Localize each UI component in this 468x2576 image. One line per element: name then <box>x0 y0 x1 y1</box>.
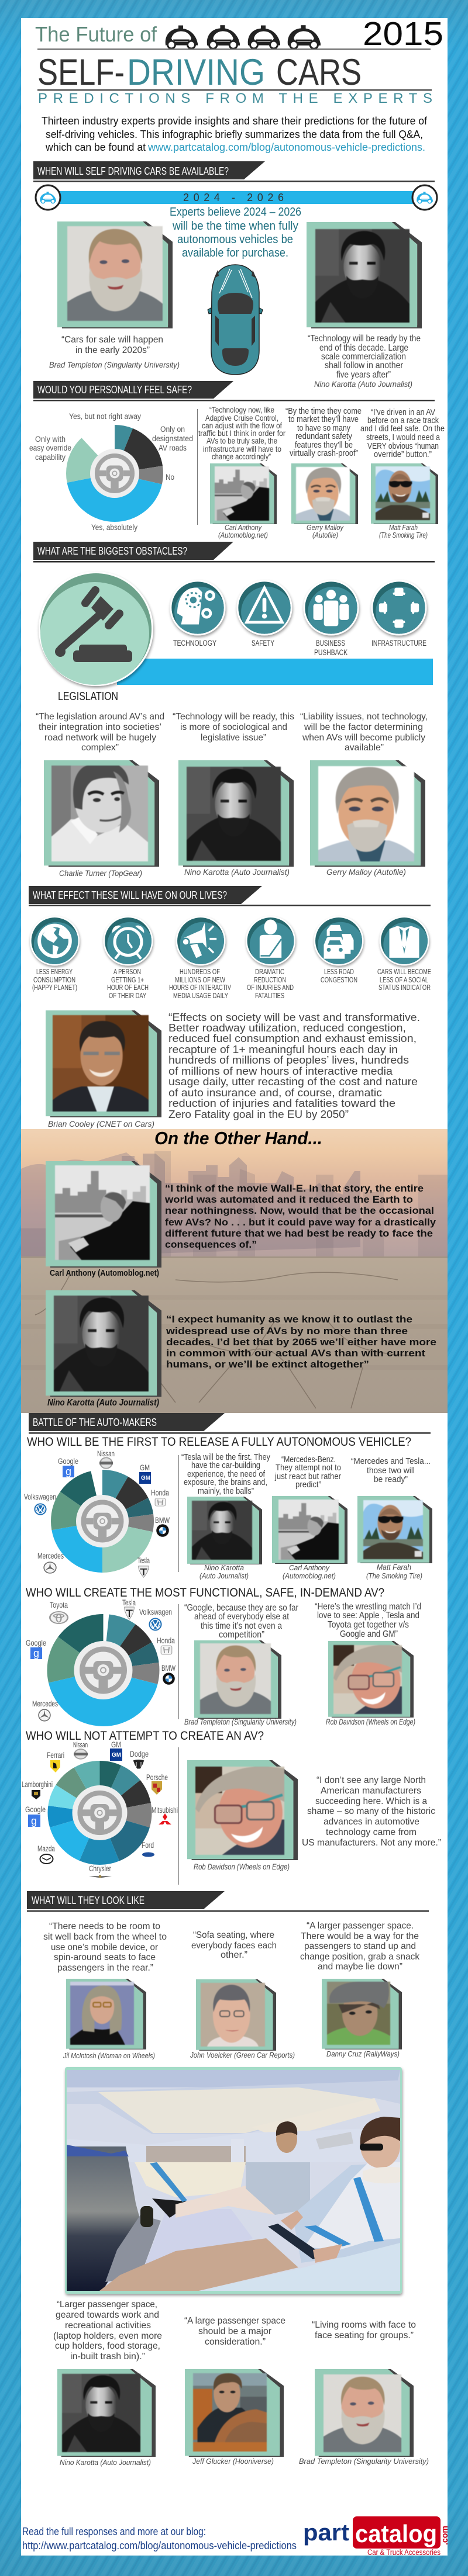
quote: Brad Templeton, Google <box>184 1603 299 1726</box>
effect: status <box>377 916 431 992</box>
section header: battle of the auto-makers <box>29 1413 431 1434</box>
brand labels and logos: Lamborghini <box>22 1780 53 1789</box>
effect: media: MILLIONS OF NEW <box>175 975 226 984</box>
quote: Jeff Glucker: “A large passenger space <box>184 2316 285 2326</box>
pie chart: feel safe: AV roads <box>159 444 187 452</box>
footer call to action: http://www.partcatalog.com/blog/autonomous-vehicle-predictions <box>22 2540 297 2551</box>
quote: Carl Anthony, Mercedes-Benz: Carl Anthony <box>289 1563 330 1572</box>
section header: what will they look like: WHAT WILL THEY LOOK LIKE <box>32 1895 144 1906</box>
pie chart: feel safe: No <box>166 473 174 482</box>
quote: Brian Cooley: of millions of new hours of interactive media <box>168 1065 393 1077</box>
expert: Brad Templeton: “Cars for sale will happen <box>61 335 163 345</box>
expert: Carl Anthony <box>46 1161 161 1278</box>
quote: Matt Farah <box>360 408 445 539</box>
pie chart: feel safe: easy override <box>29 444 71 452</box>
effect: injuries: FATALITIES <box>255 991 284 1000</box>
brand labels and logos: Ford <box>142 1841 154 1850</box>
effect: time: GETTING 1+ <box>111 975 144 984</box>
section header: when available: WHEN WILL SELF DRIVING CARS BE AVAILABLE? <box>37 165 229 177</box>
quote: Nino Karotta, larger passenger space: in-built trash bin).” <box>70 2352 145 2362</box>
expert: Rob Davidson <box>187 1760 298 1871</box>
pie chart: feel safe: Yes, absolutely <box>91 523 137 532</box>
quote: Brad Templeton, living rooms <box>299 2320 429 2466</box>
quote: Brad Templeton, Google: Brad Templeton (Singularity University) <box>184 1717 297 1726</box>
section header: when available <box>33 161 435 182</box>
headline prediction text: available for purchase. <box>182 247 288 259</box>
obstacle quote: Charlie Turner: complex” <box>81 743 119 753</box>
quote: Jeff Glucker: Jeff Glucker (Hooniverse) <box>192 2457 274 2466</box>
icon: technology <box>170 580 226 648</box>
quote: Carl Anthony: “I think of the movie Wall-E. In that story, the entire <box>165 1183 424 1194</box>
quote: Brian Cooley <box>168 1012 420 1120</box>
effect: congestion <box>314 916 364 984</box>
intro text: which can be found at <box>45 141 146 153</box>
brand labels and logos: Chrysler <box>89 1864 111 1873</box>
brand labels and logos: g <box>31 1815 37 1827</box>
quote: Carl Anthony: different future that we had best be ready to face the <box>165 1228 433 1239</box>
quote: Nino Karotta: humans, or we’ll be extinct altogether” <box>166 1359 369 1370</box>
quote: Gerry Malloy: to have so many <box>297 424 351 433</box>
brand labels and logos: GM <box>111 1740 121 1749</box>
quote: Matt Farah, Mercedes and Tesla: those two will <box>367 1466 415 1476</box>
pie chart: feel safe: capability <box>35 453 66 462</box>
effect: injuries: DRAMATIC <box>255 967 284 976</box>
quote: Gerry Malloy: virtually crash-proof” <box>290 449 358 458</box>
quote: Nino Karotta, larger passenger space: recreational activities <box>65 2321 151 2331</box>
expert: Nino Karotta <box>307 222 422 389</box>
icon: business pushback: PUSHBACK <box>314 648 347 657</box>
main title: DRIVING <box>127 52 265 93</box>
quote: Nino Karotta, Tesla first: (Auto Journalist) <box>199 1571 249 1580</box>
icon: safety: SAFETY <box>252 639 274 648</box>
quote: Matt Farah: and I did feel safe. On the <box>360 424 445 434</box>
intro text <box>42 115 428 153</box>
obstacle quote: Nino Karotta: Nino Karotta (Auto Journalist) <box>184 867 290 877</box>
obstacle quote: Charlie Turner: Charlie Turner (TopGear) <box>59 868 142 878</box>
headline prediction text: Experts believe 2024 – 2026 <box>170 206 301 219</box>
quote: Brian Cooley: reduced fuel consumption and exhaust emission, <box>168 1033 417 1044</box>
effect: time <box>103 916 153 1000</box>
effect: media <box>169 916 231 1000</box>
brand labels and logos: Mercedes <box>37 1552 64 1560</box>
quote: Carl Anthony: infrastructure will have to <box>203 445 281 453</box>
quote: Jeff Glucker <box>184 2316 285 2466</box>
quote: Nino Karotta, Tesla first: “Tesla will be the first. They <box>181 1453 271 1462</box>
headline prediction text <box>170 206 301 259</box>
effect: media: HOURS OF INTERACTIV <box>169 983 231 992</box>
brand labels and logos: g <box>66 1466 71 1477</box>
obstacle quote: Charlie Turner: “The legislation around AV’s and <box>36 712 164 722</box>
pie chart: feel safe: Only on <box>160 425 185 434</box>
brand labels and logos: Tesla <box>122 1598 136 1607</box>
obstacle quote: Gerry Malloy: available” <box>345 743 384 753</box>
quote: Carl Anthony, Mercedes-Benz: predict” <box>295 1480 321 1490</box>
section header: what will they look like <box>27 1891 429 1912</box>
quote: Nino Karotta, larger passenger space: “Larger passenger space, <box>57 2300 157 2310</box>
quote: Brian Cooley: recapture of 1+ meaningful hours each day in <box>168 1044 398 1055</box>
quote: Nino Karotta: “I expect humanity as we know it to outlast the <box>166 1314 412 1325</box>
quote: Carl Anthony, Mercedes-Benz: (Automoblog.net) <box>283 1571 336 1580</box>
brand labels and logos: Porsche <box>146 1773 168 1782</box>
obstacle quote: Gerry Malloy: when AVs will become publicly <box>302 733 425 743</box>
effect: status: CARS WILL BECOME <box>377 967 431 976</box>
brand labels and logos: Toyota <box>50 1601 68 1609</box>
expert: Nino Karotta: Nino Karotta (Auto Journalist) <box>314 379 412 389</box>
quote: Jil McIntosh <box>43 1921 167 2060</box>
quote: Danny Cruz: There would be a way for the <box>301 1931 419 1941</box>
pie chart: feel safe: Only with <box>35 435 66 444</box>
quote: Rob Davidson, wrestling match: “Here’s the wrestling match I’d <box>315 1602 421 1612</box>
quote: Carl Anthony <box>164 1183 436 1250</box>
quote: Nino Karotta: in common with our actual AVs than with current <box>166 1348 425 1359</box>
quote: Rob Davidson, wrestling match <box>315 1602 421 1726</box>
quote: Danny Cruz: Danny Cruz (RallyWays) <box>326 2049 400 2058</box>
icon: infrastructure: INFRASTRUCTURE <box>371 639 426 648</box>
heading: first to release: WHO WILL BE THE FIRST TO RELEASE A FULLY AUTONOMOUS VEHICLE? <box>27 1435 411 1449</box>
quote: Brian Cooley: hundreds of millions of peoples’ lives, hundreds <box>168 1054 409 1066</box>
expert: Brad Templeton: in the early 2020s” <box>75 345 150 355</box>
icon: legislation gavel: LEGISLATION <box>58 690 118 703</box>
main title <box>37 52 362 93</box>
section header: effects: WHAT EFFECT THESE WILL HAVE ON OUR LIVES? <box>33 889 227 901</box>
quote: Brad Templeton, Google: ahead of everybody else at <box>194 1612 289 1622</box>
obstacle quote: Gerry Malloy: Gerry Malloy (Autofile) <box>326 867 406 877</box>
obstacle quote: Gerry Malloy <box>300 712 428 877</box>
icons: self-driving cars row <box>166 25 321 49</box>
brand labels and logos: Nissan <box>97 1449 115 1458</box>
quote: Gerry Malloy: (Autofile) <box>312 531 338 539</box>
pie chart: first to release <box>24 1449 170 1577</box>
obstacle quote: Nino Karotta: legislative issue” <box>201 733 266 743</box>
quote: Gerry Malloy: to market they’ll have <box>288 415 359 424</box>
expert: Nino Karotta <box>46 1290 161 1408</box>
quote: Jil McIntosh: Jil McIntosh (Woman on Wheels) <box>63 2051 155 2060</box>
icon: car top view <box>208 265 263 375</box>
quote: Carl Anthony: consequences of.” <box>165 1239 257 1250</box>
subtitle: the future of: The Future of <box>35 22 157 46</box>
obstacle quote: Nino Karotta: is more of sociological and <box>180 722 287 732</box>
quote: Gerry Malloy: Gerry Malloy <box>307 523 344 532</box>
effect: energy: CONSUMPTION <box>33 975 75 984</box>
quote: Carl Anthony: can adjust with the flow of <box>202 421 282 430</box>
expert: Brad Templeton <box>49 221 180 369</box>
quote: Brad Templeton, Google: “Google, because they are so far <box>184 1603 299 1613</box>
logo: partcatalog.com: .com <box>440 2526 450 2545</box>
quote: Jil McIntosh: passengers in the rear.” <box>57 1963 153 1973</box>
photo: autonomous car interior <box>65 2067 402 2294</box>
section header: obstacles: WHAT ARE THE BIGGEST OBSTACLES? <box>37 545 187 557</box>
title block <box>35 15 443 106</box>
expert: Nino Karotta: end of this decade. Large <box>319 343 408 353</box>
quote: Nino Karotta, Tesla first <box>181 1453 271 1580</box>
quote: Matt Farah: override” button.” <box>374 450 432 459</box>
icon: technology: TECHNOLOGY <box>173 639 216 648</box>
expert: Rob Davidson: Rob Davidson (Wheels on Edge) <box>194 1862 290 1871</box>
intro text: www.partcatalog.com/blog/autonomous-vehicle-predictions. <box>147 141 425 153</box>
effect: energy <box>30 916 80 992</box>
quote: Matt Farah: streets, I would need a <box>366 433 441 442</box>
quote: Matt Farah: before on a race track <box>367 416 439 425</box>
quote: Carl Anthony, Mercedes-Benz: just react but rather <box>274 1472 341 1481</box>
heading: most functional: WHO WILL CREATE THE MOST FUNCTIONAL, SAFE, IN-DEMAND AV? <box>26 1586 384 1599</box>
quote: Carl Anthony, Mercedes-Benz <box>272 1455 347 1580</box>
quote: Rob Davidson: American manufacturers <box>321 1786 421 1796</box>
brand labels and logos: Google <box>26 1639 46 1647</box>
quote: Matt Farah: VERY obvious “human <box>367 442 439 451</box>
quote: Rob Davidson, wrestling match: Rob Davidson (Wheels on Edge) <box>326 1717 415 1726</box>
effect: time: OF THEIR DAY <box>109 991 146 1000</box>
quote: Matt Farah: Matt Farah <box>389 523 418 532</box>
quote: Carl Anthony: Carl Anthony <box>225 523 262 532</box>
expert: Nino Karotta: Nino Karotta (Auto Journalist) <box>47 1398 159 1408</box>
effect: congestion: CONGESTION <box>321 975 357 984</box>
year: 2015 <box>363 15 443 53</box>
brand labels and logos: BMW <box>161 1664 176 1673</box>
quote: Brad Templeton, living rooms: face seating for groups.” <box>315 2331 414 2340</box>
brand labels and logos: Google <box>58 1457 78 1466</box>
footer call to action: Read the full responses and more at our blog: <box>22 2526 206 2537</box>
brand labels and logos: GM <box>112 1752 121 1758</box>
icon: legislation gavel <box>39 572 153 703</box>
timeline band 2024-2026 <box>36 185 437 210</box>
effect: injuries <box>246 916 295 1000</box>
quote: Matt Farah, Mercedes and Tesla <box>351 1457 432 1580</box>
effect: injuries: REDUCTION <box>254 975 286 984</box>
quote: John Voelcker: everybody faces each <box>191 1941 277 1951</box>
quote: Nino Karotta, larger passenger space: (laptop holders, even more <box>53 2331 162 2341</box>
quote: Matt Farah, Mercedes and Tesla: (The Smoking Tire) <box>366 1571 422 1580</box>
quote: Rob Davidson: shame – so many of the historic <box>307 1806 435 1816</box>
brand labels and logos <box>26 1598 176 1721</box>
footer call to action <box>22 2526 297 2551</box>
pie chart: most functional <box>26 1598 176 1721</box>
quote: Jil McIntosh: sit well back from the wheel to <box>43 1932 167 1942</box>
pie chart: feel safe: designstated <box>152 434 193 443</box>
quote: Gerry Malloy <box>285 407 362 539</box>
quote: Jil McIntosh: “There needs to be room to <box>49 1921 160 1931</box>
quote: Nino Karotta <box>166 1314 436 1370</box>
brand labels and logos: Mitsubishi <box>152 1806 178 1815</box>
quote: Nino Karotta, Tesla first: mainly, the balls” <box>198 1487 254 1496</box>
quote: John Voelcker: John Voelcker (Green Car Reports) <box>190 2051 295 2059</box>
quote: Danny Cruz: and maybe lie down” <box>318 1962 402 1972</box>
quote: Rob Davidson, wrestling match: Toyota get together v/s <box>328 1620 409 1630</box>
obstacle quote: Nino Karotta <box>173 712 294 877</box>
expert: Nino Karotta: five years after” <box>336 370 391 380</box>
quote: Carl Anthony: few AVs? No . . . but it could pave way for a drastically <box>165 1217 436 1228</box>
pie chart: feel safe <box>29 412 193 532</box>
quote: Nino Karotta: decades. I’d bet that by 2065 we’ll either have more <box>166 1337 436 1348</box>
effect: energy: LESS ENERGY <box>36 967 73 976</box>
quote: Brad Templeton, Google: competition” <box>219 1630 264 1640</box>
tagline: PREDICTIONS FROM THE EXPERTS <box>38 91 432 106</box>
quote: Matt Farah: “I’ve driven in an AV <box>371 408 435 417</box>
obstacle quote: Gerry Malloy: will be the factor determining <box>304 722 423 732</box>
quote: Brian Cooley: Better roadway utilization, reduced congestion, <box>168 1022 406 1034</box>
brand labels and logos: Tesla <box>137 1556 150 1565</box>
quote: Rob Davidson <box>302 1775 441 1848</box>
quote: Matt Farah, Mercedes and Tesla: be ready” <box>374 1475 408 1484</box>
brand labels and logos: g <box>33 1647 39 1659</box>
quote: Carl Anthony: traffic but I think in order for <box>198 429 285 438</box>
quote: Matt Farah, Mercedes and Tesla: “Mercedes and Tesla... <box>351 1457 431 1466</box>
quote: Rob Davidson: US manufacturers. Not any more.” <box>302 1838 441 1848</box>
quote: Brian Cooley: Zero Fatality goal in the EU by 2050” <box>168 1109 349 1120</box>
section header: battle of the auto-makers: BATTLE OF THE AUTO-MAKERS <box>33 1417 157 1428</box>
expert: Brian Cooley <box>46 1010 161 1128</box>
section header: feel safe <box>33 381 435 401</box>
headline prediction text: will be the time when fully <box>172 220 298 233</box>
timeline band 2024-2026: 2024 - 2026 <box>183 192 284 203</box>
quote: Brad Templeton, living rooms: “Living rooms with face to <box>312 2320 416 2330</box>
effect: media: HUNDREDS OF <box>180 967 220 976</box>
quote: John Voelcker: “Sofa seating, where <box>193 1930 274 1940</box>
quote: Gerry Malloy: features they’ll be <box>295 441 353 450</box>
brand labels and logos: GM <box>140 1463 150 1472</box>
brand labels and logos: Mazda <box>37 1844 55 1853</box>
icon: infrastructure <box>371 580 427 648</box>
expert: Nino Karotta: shall follow in another <box>325 361 404 371</box>
quote: Carl Anthony: change accordingly” <box>212 452 271 461</box>
quote: Nino Karotta, larger passenger space <box>53 2300 162 2467</box>
effect: time: HOUR OF EACH <box>107 983 149 992</box>
quote: Nino Karotta: widespread use of AVs by no more than three <box>166 1325 408 1337</box>
heading: on the other hand: On the Other Hand... <box>154 1128 322 1148</box>
effect: status: STATUS INDICATOR <box>378 983 431 992</box>
quote: Jil McIntosh: spin-around seats to face <box>54 1952 156 1962</box>
quote: Rob Davidson: “I don’t see any large North <box>316 1775 426 1785</box>
quote: Rob Davidson: advances in automotive <box>324 1817 419 1827</box>
quote: Carl Anthony: “Technology now, like <box>209 406 274 414</box>
quote: Carl Anthony: Adaptive Cruise Control, <box>205 414 278 423</box>
quote: Rob Davidson: succeeding here. Which is a <box>315 1796 427 1806</box>
brand labels and logos: Nissan <box>73 1740 88 1749</box>
quote: Brian Cooley: of auto insurance and, of course, dramatic <box>168 1087 382 1099</box>
quote: Rob Davidson, wrestling match: love to see: Apple , Tesla and <box>317 1611 419 1621</box>
quote: Nino Karotta, Tesla first: have the car-building <box>191 1461 260 1470</box>
logo: partcatalog.com <box>303 2516 450 2557</box>
brand labels and logos: Ferrari <box>47 1751 64 1760</box>
expert: Carl Anthony: Carl Anthony (Automoblog.net) <box>50 1269 159 1278</box>
brand labels and logos: Volkswagen <box>24 1493 56 1501</box>
quote: Brian Cooley: reduction of injuries and fatalities toward the <box>168 1097 395 1109</box>
quote: Danny Cruz: passengers to stand up and <box>304 1941 416 1951</box>
obstacle quote: Charlie Turner: road network will be hugely <box>44 733 156 743</box>
panel: on the other hand <box>21 1128 448 1413</box>
heading: will not attempt: WHO WILL NOT ATTEMPT TO CREATE AN AV? <box>26 1729 264 1743</box>
effect: congestion: LESS ROAD <box>324 967 354 976</box>
effect: energy: (HAPPY PLANET) <box>32 983 77 992</box>
quote: Rob Davidson: technology came from <box>326 1827 417 1837</box>
logo: partcatalog.com: catalog <box>355 2520 437 2547</box>
quote: John Voelcker <box>190 1930 295 2059</box>
icon: business pushback <box>303 580 359 657</box>
quote: Jeff Glucker: should be a major <box>198 2326 272 2336</box>
quote: Matt Farah: (The Smoking Tire) <box>379 531 428 539</box>
obstacle quote: Charlie Turner <box>36 712 164 878</box>
quote: Matt Farah, Mercedes and Tesla: Matt Farah <box>377 1563 411 1571</box>
quote: Brian Cooley: usage daily, utter recasting of the cost and nature <box>168 1076 418 1088</box>
quote: Gerry Malloy: redundant safety <box>295 432 353 441</box>
effect: media: MEDIA USAGE DAILY <box>173 991 228 1000</box>
quote: Nino Karotta, Tesla first: exposure, the brains and, <box>184 1478 267 1487</box>
quote: Nino Karotta, larger passenger space: geared towards work and <box>56 2310 159 2320</box>
quote: Carl Anthony <box>198 406 285 539</box>
quote: Danny Cruz: “A larger passenger space. <box>307 1921 414 1931</box>
quote: Carl Anthony, Mercedes-Benz: They attempt not to <box>276 1463 341 1473</box>
section header: effects <box>29 886 431 906</box>
section header: feel safe: WOULD YOU PERSONALLY FEEL SAFE? <box>37 384 192 396</box>
quote: Nino Karotta, Tesla first: Nino Karotta <box>204 1563 244 1572</box>
expert: Brian Cooley: Brian Cooley (CNET on Cars) <box>48 1119 154 1128</box>
obstacle quote: Nino Karotta: “Technology will be ready, this <box>173 712 294 722</box>
intro text: self-driving vehicles. This infographic briefly summarizes the data from the full Q&A, <box>46 128 423 140</box>
obstacle quote: Charlie Turner: their integration into societies’ <box>39 722 161 732</box>
main title: SELF- <box>37 52 125 93</box>
brand labels and logos <box>24 1449 170 1577</box>
brand labels and logos: Honda <box>151 1488 169 1497</box>
quote: Carl Anthony: near nothingness. Now, would that be the occasional <box>165 1205 434 1216</box>
expert: Nino Karotta: scale commercialization <box>321 352 406 362</box>
icon: business pushback: BUSINESS <box>316 639 345 648</box>
effect: time: A PERSON <box>113 967 141 976</box>
brand labels and logos: Volkswagen <box>139 1608 172 1616</box>
quote: Brad Templeton, Google: this time it’s not even a <box>201 1621 282 1631</box>
headline prediction text: autonomous vehicles be <box>177 233 293 246</box>
quote: Carl Anthony, Mercedes-Benz: “Mercedes-Benz. <box>281 1455 336 1464</box>
quote: Jil McIntosh: use one’s mobile device, or <box>51 1943 159 1952</box>
quote: Carl Anthony: (Automoblog.net) <box>218 531 268 539</box>
section header: obstacles <box>33 542 435 562</box>
brand labels and logos: Google <box>25 1805 46 1814</box>
pie chart: will not attempt <box>22 1740 178 1878</box>
brand labels and logos: BMW <box>155 1516 170 1525</box>
obstacle quote: Gerry Malloy: “Liability issues, not technology, <box>300 712 428 722</box>
quote: Nino Karotta, Tesla first: experience, the need of <box>187 1470 266 1479</box>
effect: status: LESS OF A SOCIAL <box>380 975 428 984</box>
quote: Nino Karotta, larger passenger space: cup holders, food storage, <box>55 2341 160 2351</box>
quote: Brad Templeton, living rooms: Brad Templeton (Singularity University) <box>299 2457 429 2466</box>
expert: Brad Templeton: Brad Templeton (Singularity University) <box>49 360 180 369</box>
quote: John Voelcker: other.” <box>221 1950 247 1960</box>
expert: Nino Karotta: “Technology will be ready by the <box>308 334 421 344</box>
pie chart: feel safe: Yes, but not right away <box>69 412 141 421</box>
intro text: Thirteen industry experts provide insights and share their predictions for the future of <box>42 115 428 127</box>
quote: Danny Cruz: change position, grab a snack <box>300 1952 420 1962</box>
brand labels and logos: Dodge <box>130 1750 149 1758</box>
effect: injuries: OF INJURIES AND <box>247 983 294 992</box>
quote: Carl Anthony: AVs to be truly safe, the <box>207 437 277 445</box>
logo: partcatalog.com: part <box>303 2520 349 2546</box>
quote: Jeff Glucker: consideration.” <box>205 2337 266 2347</box>
brand labels and logos: Honda <box>157 1636 175 1645</box>
quote: Rob Davidson, wrestling match: Google and GM” <box>340 1629 398 1639</box>
quote: Carl Anthony: world was automated and it reduced the Earth to <box>164 1194 413 1205</box>
icon: safety <box>236 580 292 648</box>
quote: Brian Cooley: “Effects on society will be vast and transformative. <box>168 1012 420 1023</box>
quote: Nino Karotta, larger passenger space: Nino Karotta (Auto Journalist) <box>60 2458 151 2467</box>
logo: partcatalog.com: Car & Truck Accessories <box>367 2548 441 2557</box>
quote: Danny Cruz <box>300 1921 420 2058</box>
quote: Gerry Malloy: “By the time they come <box>285 407 362 416</box>
blue band behind legislation <box>117 659 433 685</box>
brand labels and logos: GM <box>141 1475 150 1481</box>
brand labels and logos: Mercedes <box>32 1699 58 1708</box>
brand labels and logos <box>22 1740 178 1878</box>
main title: CARS <box>276 52 362 93</box>
